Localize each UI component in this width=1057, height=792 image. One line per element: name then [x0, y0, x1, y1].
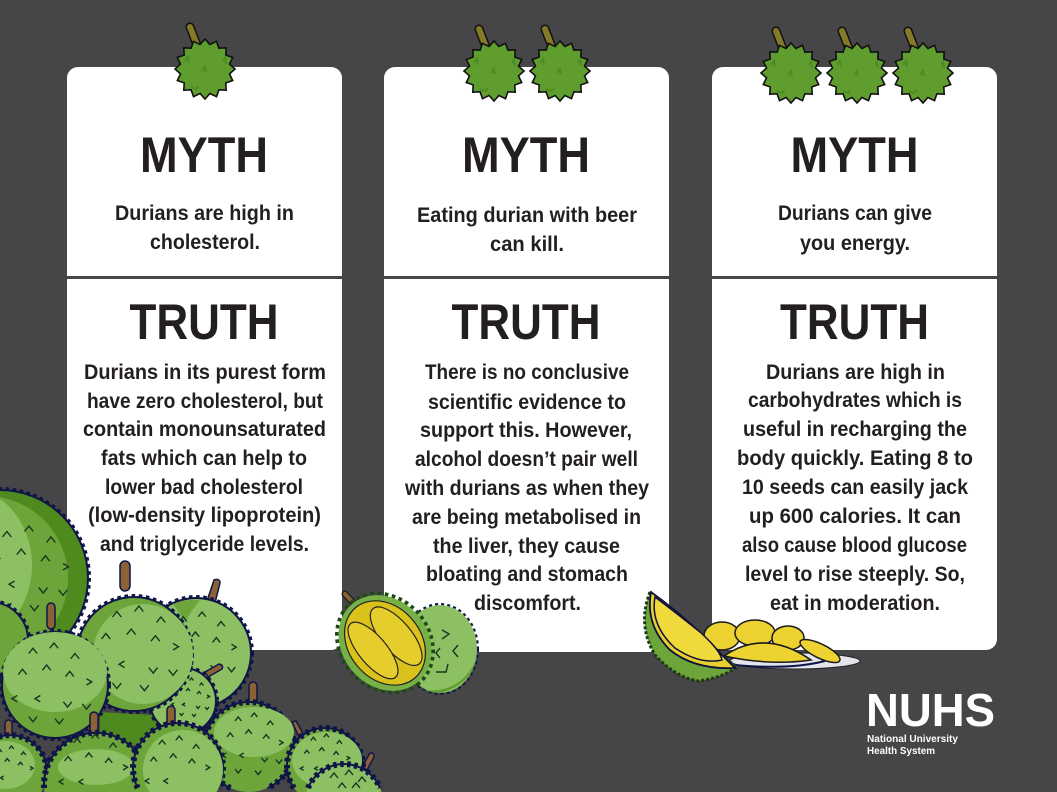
durian: far right [307, 764, 381, 792]
text: truth statement 1: contain monounsaturated [83, 418, 326, 441]
durian: back right [141, 598, 251, 708]
text: truth statement 1 [83, 361, 326, 556]
panel: card 2 [384, 67, 669, 652]
illustration: opened durian [319, 576, 477, 710]
heading: myth 1: MYTH [140, 127, 268, 183]
durian: front left [2, 632, 108, 738]
text: truth statement 2: support this. However, [420, 419, 632, 442]
text: myth statement 2 [417, 204, 637, 256]
text: truth statement 3: carbohydrates which is [748, 389, 962, 412]
text: truth statement 1: and triglyceride levels. [100, 533, 309, 556]
durian: centre [77, 597, 193, 711]
stem [5, 720, 12, 740]
logo: NUHS: NUHS [866, 684, 995, 736]
text: myth statement 3: you energy. [800, 232, 910, 255]
stem [120, 561, 130, 591]
text: truth statement 1: have zero cholesterol, but [87, 390, 323, 413]
text: truth statement 2: alcohol doesn’t pair well [415, 448, 638, 471]
icon: two durian rating, card 2 [464, 29, 590, 101]
illustration: durian pods on plate [645, 592, 860, 681]
shell with pod [645, 592, 737, 681]
stem [205, 664, 223, 677]
durian: right [287, 728, 363, 792]
heading: truth 3: TRUTH [780, 294, 929, 350]
text: truth statement 2: with durians as when they [404, 477, 649, 500]
durian: bottom middle [133, 723, 223, 792]
text: truth statement 1: Durians in its purest form [84, 361, 326, 384]
front shell [319, 576, 451, 710]
text: truth statement 3: eat in moderation. [770, 592, 940, 615]
heading: myth 3: MYTH [790, 127, 918, 183]
text: myth statement 1: Durians are high in [115, 202, 294, 225]
text: truth statement 3 [737, 361, 973, 615]
text: truth statement 1: (low-density lipoprotein) [88, 504, 321, 527]
text: truth statement 3: 10 seeds can easily jack [742, 476, 968, 499]
text: myth statement 1 [115, 202, 294, 254]
stem [345, 594, 358, 608]
stem [167, 706, 175, 726]
text: truth statement 3: body quickly. Eating 8 to [737, 447, 973, 470]
stem [362, 753, 374, 770]
heading: truth 1: TRUTH [130, 294, 278, 350]
durian: bottom centre [44, 733, 148, 792]
stem [292, 721, 304, 737]
text: truth statement 3: useful in recharging the [743, 418, 967, 441]
durian: bottom left [0, 735, 47, 792]
heading: myth 2: MYTH [462, 127, 590, 183]
stem [207, 579, 220, 603]
text: myth statement 1: cholesterol. [150, 231, 260, 254]
panel: card 1 [67, 67, 342, 650]
text: truth statement 3: level to rise steeply. So, [745, 563, 965, 586]
text: myth statement 3 [778, 202, 932, 255]
stem [249, 682, 257, 706]
back shell [403, 605, 477, 693]
text: truth statement 2: scientific evidence to [428, 391, 626, 414]
icon: one durian rating, card 1 [175, 27, 235, 99]
illustration: durian pile [0, 489, 381, 792]
stem fill [345, 594, 358, 608]
text: myth statement 3: Durians can give [778, 202, 932, 225]
text: truth statement 1: fats which can help to [101, 447, 307, 470]
durian: large back left [0, 489, 88, 666]
text: truth statement 1: lower bad cholesterol [105, 476, 303, 499]
text: myth statement 2: Eating durian with beer [417, 204, 637, 227]
text: truth statement 3: Durians are high in [766, 361, 945, 384]
text: truth statement 2: the liver, they cause [433, 535, 620, 558]
icon: three durian rating, card 3 [761, 31, 953, 103]
logo: NUHS: Health System [867, 745, 935, 757]
text: truth statement 2: There is no conclusive [425, 361, 629, 384]
text: truth statement 2: bloating and stomach [426, 563, 628, 586]
text: truth statement 2: discomfort. [474, 592, 581, 615]
stem [90, 712, 98, 736]
text: myth statement 2: can kill. [490, 233, 564, 256]
plate [730, 653, 860, 669]
heading: truth 2: TRUTH [452, 294, 600, 350]
pods [704, 620, 843, 667]
stem [47, 603, 55, 629]
text: truth statement 3: up 600 calories. It can [749, 505, 961, 528]
text: truth statement 2 [404, 361, 649, 615]
panel: card 3 [712, 67, 997, 650]
durian: bottom right-centre [204, 702, 294, 792]
durian: small middle [150, 668, 216, 734]
logo: NUHS: National University [867, 733, 958, 745]
text: truth statement 3: also cause blood glucose [742, 534, 967, 557]
durian: small left [0, 602, 28, 678]
text: truth statement 2: are being metabolised in [412, 506, 641, 529]
